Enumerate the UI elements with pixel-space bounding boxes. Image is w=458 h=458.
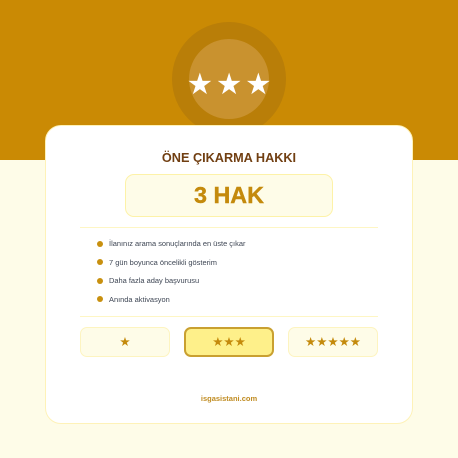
icon: three white stars: ★★★ [187,67,274,101]
callout: 3 HAK: 3 HAK [194,182,264,208]
option: three stars selected [184,327,274,357]
benefit 3: Daha fazla aday başvurusu [109,276,199,285]
footer website: isgasistani.com [201,394,257,402]
badge inner circle [189,39,269,119]
benefits list [97,239,246,304]
callout: 3 HAK [125,174,333,217]
option: one star [80,327,170,357]
benefit 2: 7 gün boyunca öncelikli gösterim [109,258,217,266]
header band [0,0,458,160]
icon: star badge [172,22,286,136]
option: five stars: ★★★★★ [305,334,361,349]
heading: ÖNE ÇIKARMA HAKKI [162,151,296,165]
option: three stars selected: ★★★ [212,334,246,349]
option: one star: ★ [119,334,131,349]
option: five stars [288,327,378,357]
panel: main card [45,125,413,424]
benefit 1: İlanınız arama sonuçlarında en üste çıkar [109,239,245,248]
benefit 4: Anında aktivasyon [109,294,170,304]
